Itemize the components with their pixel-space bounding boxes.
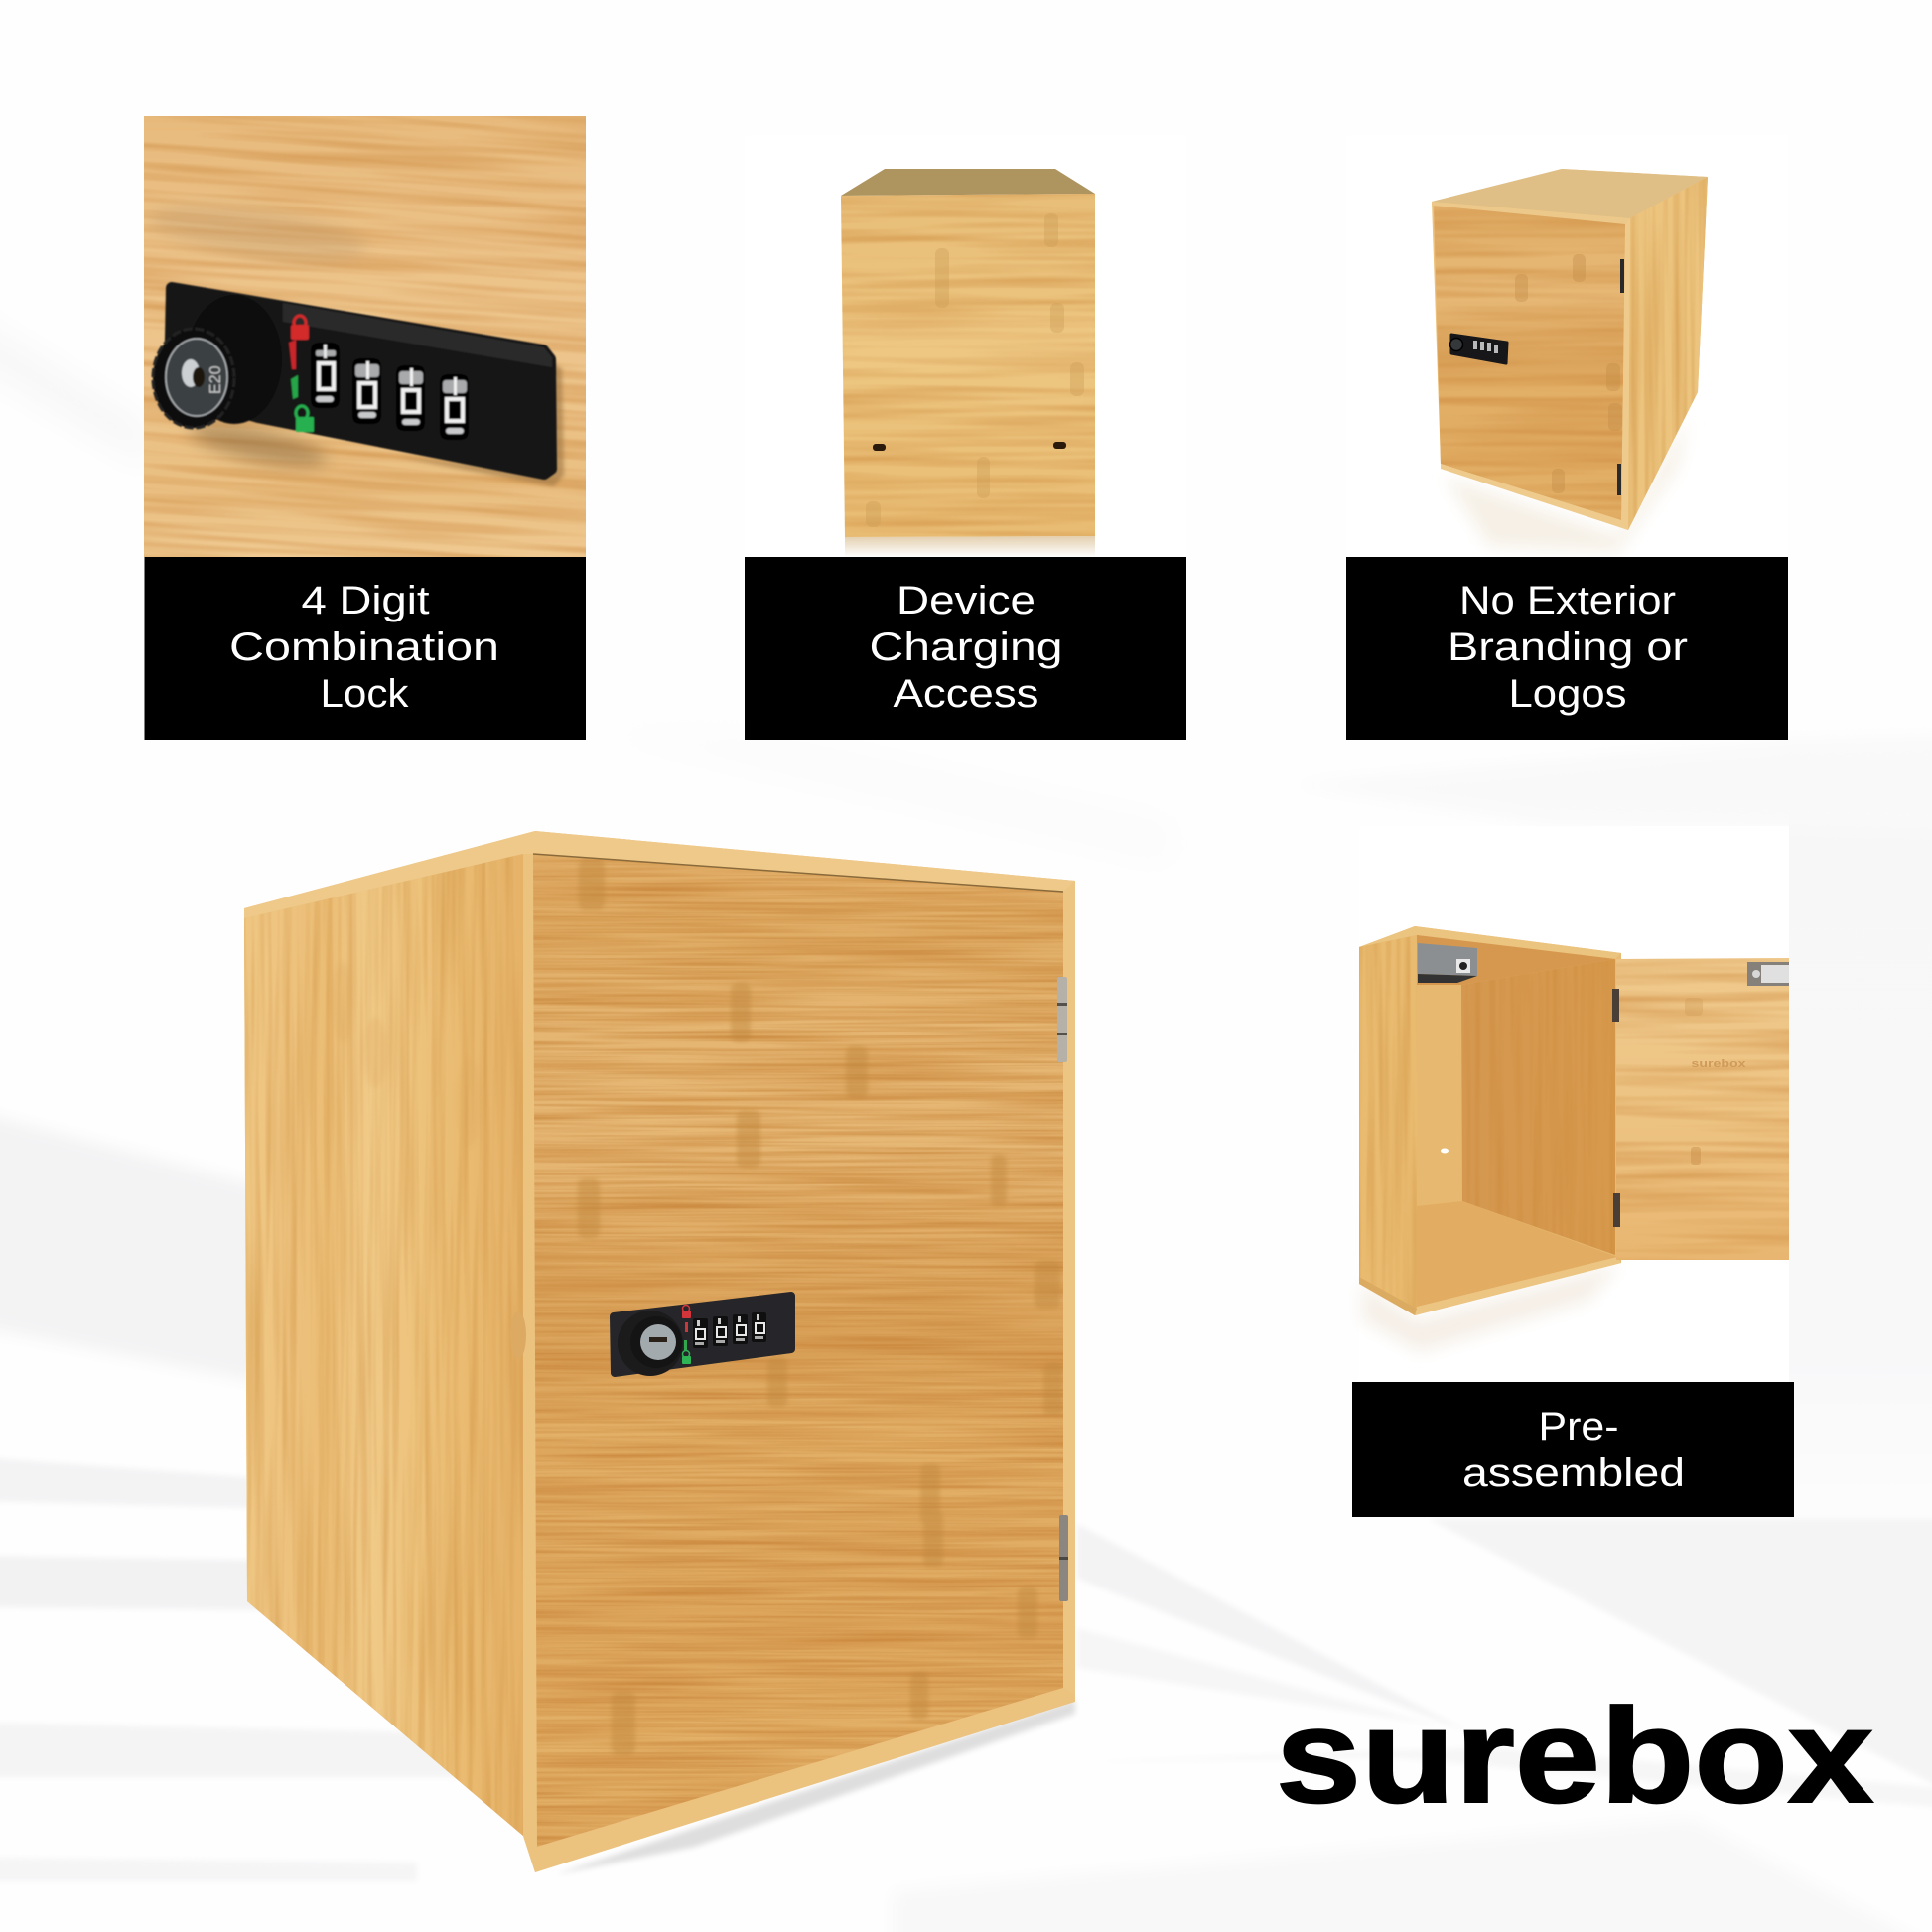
top hinge (1057, 977, 1067, 1062)
caption bar: No Exterior (1459, 579, 1676, 622)
cabinet three-quarter view (1430, 169, 1713, 552)
front frame edge left (523, 854, 537, 1847)
charging slots (873, 444, 886, 451)
caption bar: Access (894, 672, 1038, 716)
caption bar: Logos (1509, 672, 1626, 716)
front bottom edge (1415, 1257, 1621, 1315)
digit wheels (693, 1318, 708, 1348)
logo: surebox: surebox (1276, 1681, 1873, 1831)
panel: 4 digit combination lock (144, 116, 586, 740)
caption bar: Lock (320, 672, 410, 716)
close-up photo of lock on bamboo: E20 (207, 365, 224, 394)
panel: pre-assembled open cabinet (1352, 926, 1794, 1517)
caption bar: Charging (870, 625, 1062, 669)
lock knob front (153, 329, 234, 428)
engraved brand on door: surebox (1692, 1058, 1747, 1070)
hinges (1620, 259, 1624, 293)
door top gap line (533, 854, 1063, 892)
top edge (244, 831, 1075, 918)
floor (1417, 1201, 1617, 1309)
caption bar (145, 557, 586, 740)
cabinet rear view (839, 169, 1097, 557)
right frame edge (1615, 953, 1621, 1263)
main product: large bamboo cabinet (242, 831, 1075, 1874)
cabinet top edge (1359, 926, 1621, 959)
red lock icon (291, 325, 309, 340)
shadow below cabinet (556, 1700, 1075, 1874)
left side panel (242, 849, 525, 1842)
finger notch (510, 1311, 526, 1359)
panel: no exterior branding or logos (1346, 135, 1788, 740)
combination lock (614, 1296, 791, 1376)
frame edge right (1063, 881, 1075, 1696)
lock mechanism (1418, 943, 1477, 976)
right interior wall (1459, 953, 1618, 1261)
charging hole (1441, 1148, 1449, 1154)
caption bar: Combination (229, 625, 499, 669)
open cabinet (1359, 926, 1789, 1352)
frame edge bottom (523, 1688, 1075, 1872)
panel: device charging access (745, 135, 1186, 740)
caption bar: Branding or (1448, 625, 1688, 669)
hinges (1612, 989, 1619, 1022)
caption bar: Pre- (1539, 1405, 1618, 1449)
silhouette (244, 831, 1075, 1872)
lock plate (170, 288, 551, 474)
green lock icon (291, 375, 298, 399)
caption bar (745, 557, 1186, 740)
caption bar (1352, 1382, 1794, 1517)
caption bar: assembled (1462, 1451, 1685, 1495)
lock indicators (682, 1311, 691, 1318)
lock knob back ring (187, 295, 282, 424)
interior ceiling (1417, 935, 1615, 985)
close-up photo of lock on bamboo (144, 116, 586, 557)
bottom hinge (1059, 1515, 1068, 1601)
back wall (1417, 985, 1462, 1206)
digit wheels (311, 343, 469, 440)
bamboo knots (578, 859, 1063, 1755)
caption bar: 4 Digit (302, 579, 429, 622)
caption bar: Device (897, 579, 1035, 622)
outer side (1359, 933, 1419, 1311)
door panel (531, 852, 1067, 1850)
door latch (1747, 962, 1789, 986)
open door (1616, 958, 1789, 1260)
silhouette (1359, 926, 1621, 1315)
exterior lock (1451, 335, 1507, 363)
caption bar (1346, 557, 1788, 740)
